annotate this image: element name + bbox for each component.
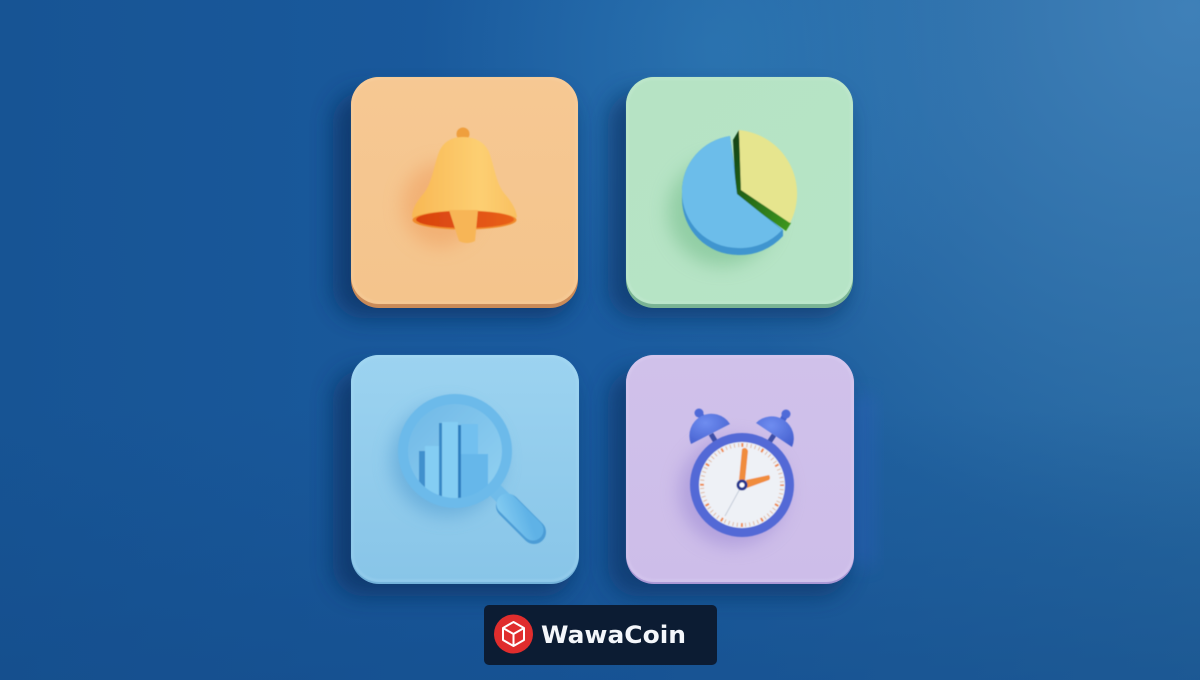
panel: blue magnifier card [333, 355, 579, 596]
logo badge [484, 605, 717, 665]
panel: green pie chart card [608, 77, 853, 318]
bells [689, 408, 794, 447]
handle [497, 492, 534, 532]
bar chart [419, 422, 488, 499]
panel: purple alarm clock card [608, 355, 874, 596]
icon: magnifier with bars [403, 399, 534, 532]
icon: red cube logo [494, 614, 533, 654]
clock hands [725, 448, 770, 516]
brand name: WawaCoin [541, 621, 686, 649]
clock ticks [702, 445, 782, 525]
icon: bell [412, 128, 517, 243]
icon: pie chart [682, 130, 797, 255]
icon: alarm clock [689, 408, 794, 537]
panel: orange bell card [333, 77, 578, 318]
